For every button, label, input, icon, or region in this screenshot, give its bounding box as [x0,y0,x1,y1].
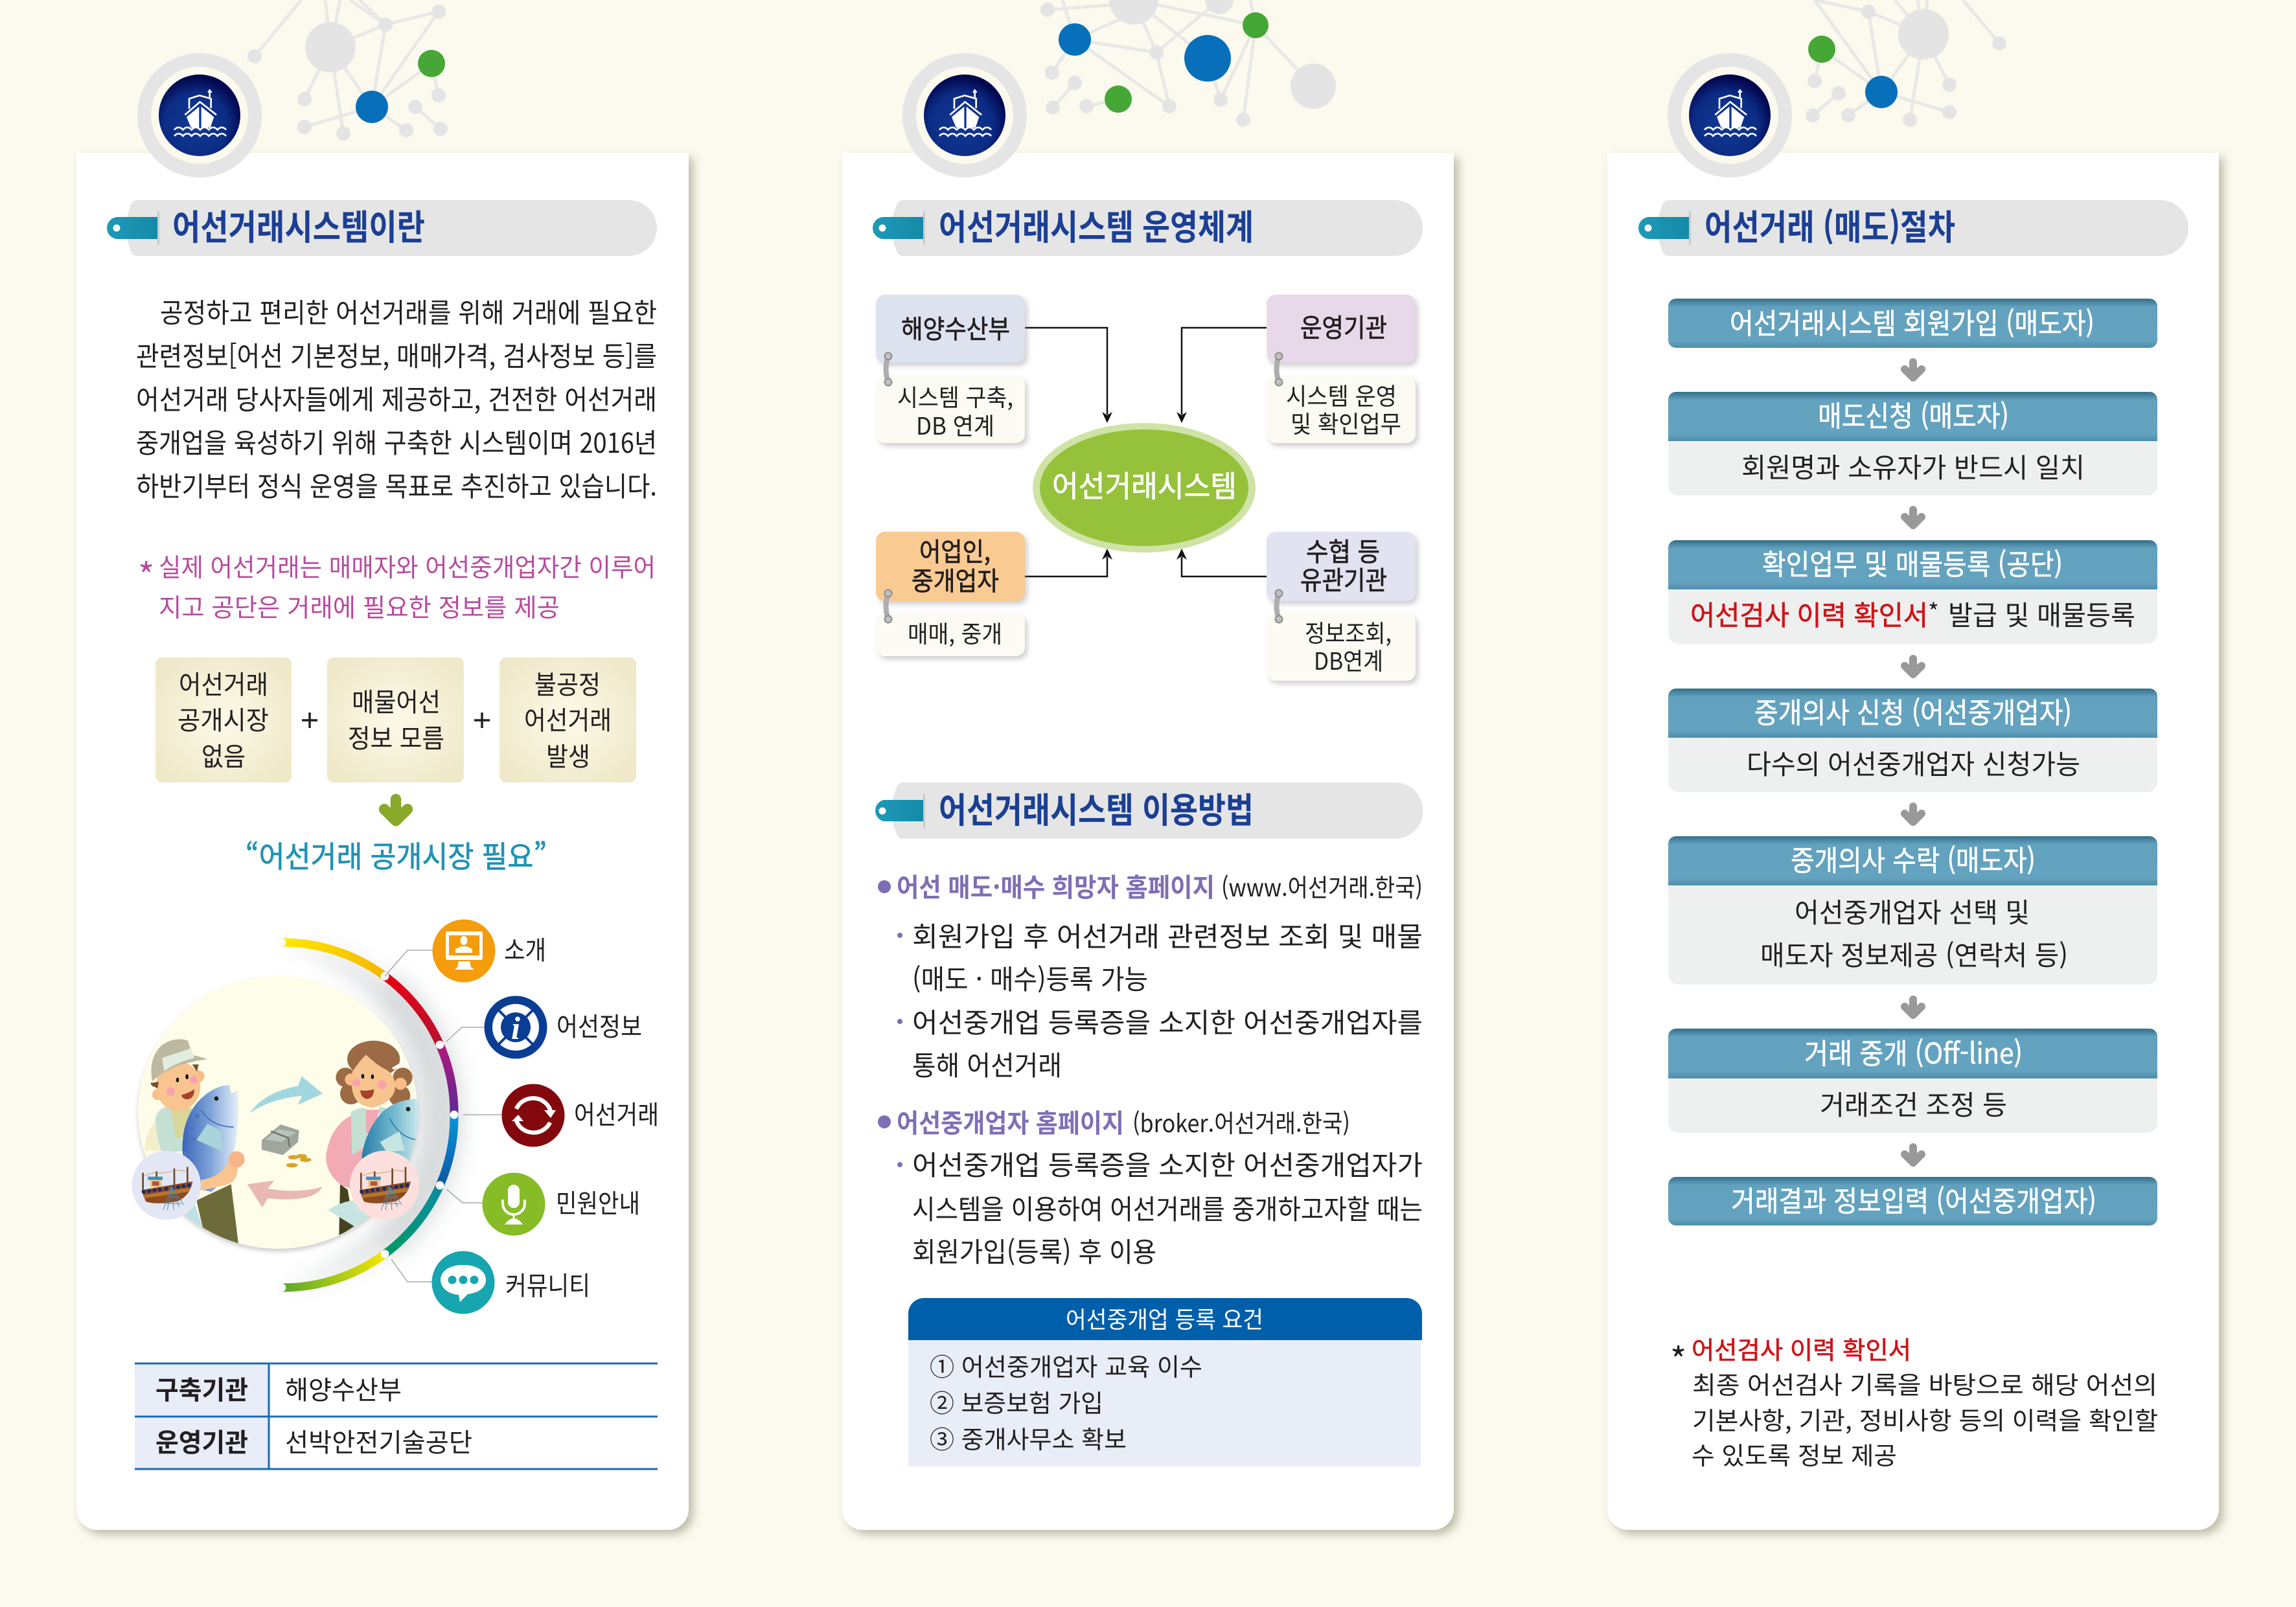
icon: 어선정보 info [485,996,547,1058]
panel: 어선거래 매도 절차 [1607,53,2219,1530]
step 5: 중개의사 수락: 어선중개업자 선택 및 [1795,891,2030,931]
arrow: connectors into central ellipse [1025,328,1267,576]
callout: 어선거래 공개시장 필요: “어선거래 공개시장 필요” [246,834,547,876]
figure: fisherman with fish [144,1039,245,1246]
text block: 매도·매수 희망자 홈페이지: 어선 매도·매수 희망자 홈페이지 [897,867,1215,904]
step 5: 중개의사 수락: 매도자 정보제공 (연락처 등) [1760,934,2068,974]
text block: footnote on inspection certificate: 기본사항, 기관, 정비사항 등의 이력을 확인할 [1692,1401,2158,1437]
step 3: 확인업무 및 매물등록: * [1928,594,1939,628]
icon: 어선정보 info: i [511,1010,520,1046]
step 7: 거래결과 정보입력: 거래결과 정보입력 (어선중개업자) [1731,1178,2096,1220]
illustration: fish trade between fisherman and buyer [132,976,419,1251]
text block: 매도·매수 희망자 홈페이지: 통해 어선거래 [912,1044,1062,1084]
card: 어업인, 중개업자: 매매, 중개 [908,615,1002,650]
step 2: 매도신청 [1668,392,2157,496]
plus sign [302,712,317,728]
step 3: 확인업무 및 매물등록 [1668,540,2157,644]
card: 어업인, 중개업자 [876,531,1025,656]
label: 커뮤니티: 커뮤니티 [505,1265,590,1303]
text block: 어선중개업자 홈페이지: 회원가입(등록) 후 이용 [912,1231,1156,1270]
arrow: step 5 to 6 [1905,999,1922,1015]
step 6: 거래 중개: 거래조건 조정 등 [1820,1084,2007,1123]
text block: footnote on inspection certificate: * [1670,1332,1686,1384]
step 2: 매도신청: 회원명과 소유자가 반드시 일치 [1741,446,2085,486]
heading: 어선거래시스템이란 [107,199,657,256]
icon: 커뮤니티 speech bubble [431,1251,495,1314]
card: 해양수산부: 해양수산부 [901,308,1010,346]
diagram: operating structure [876,295,1416,681]
step 6: 거래 중개 [1668,1029,2157,1133]
text block: system description: 관련정보[어선 기본정보, 매매가격, 검사정보 등]를 [136,335,657,374]
step 3: 확인업무 및 매물등록: 확인업무 및 매물등록 (공단) [1762,541,2063,583]
step 4: 중개의사 신청: 다수의 어선중개업자 신청가능 [1747,743,2080,782]
text block: 매도·매수 희망자 홈페이지: 어선중개업 등록증을 소지한 어선중개업자를 [912,1001,1423,1041]
arrow: step 3 to 4 [1905,659,1922,674]
card: 운영기관: 및 확인업무 [1291,405,1401,440]
box: 어선중개업 등록 요건 [908,1298,1422,1466]
icon: 민원안내 microphone [482,1172,545,1236]
card: 운영기관: 시스템 운영 [1286,377,1397,412]
icon: boat in right bubble [350,1151,419,1220]
text block: 어선중개업자 홈페이지: 시스템을 이용하여 어선거래를 중개하고자할 때는 [912,1188,1423,1227]
card: 해양수산부 [876,295,1025,443]
step 5: 중개의사 수락 [1668,836,2157,985]
text block: 매도·매수 희망자 홈페이지: 회원가입 후 어선거래 관련정보 조회 및 매물 [912,915,1423,955]
box: 어선중개업 등록 요건: ③ 중개사무소 확보 [930,1420,1127,1455]
arc: coloured menu ring [278,939,458,1292]
icon: 소개 monitor [433,920,495,982]
network decoration: right [1806,0,2006,127]
text block: footnote on inspection certificate: 최종 어선검사 기록을 바탕으로 해당 어선의 [1692,1365,2157,1401]
network decoration: centre [1040,0,1336,127]
icon: banknotes and coins [262,1124,312,1167]
arrow: step 6 to 7 [1905,1147,1922,1163]
card: 수협 등 유관기관: 수협 등 [1306,531,1380,569]
label: 어선정보: 어선정보 [557,1006,642,1043]
box: 불공정 어선거래 발생: 어선거래 [524,700,612,737]
box: 어선중개업 등록 요건: ② 보증보험 가입 [930,1384,1103,1419]
text block: footnote on inspection certificate [1670,1330,2158,1472]
step 5: 중개의사 수락: 중개의사 수락 (매도자) [1791,838,2036,879]
box: 어선거래 공개시장 없음: 공개시장 [178,700,269,737]
table: organizations: 해양수산부 [285,1369,402,1407]
text block: note in pink: * [138,548,154,599]
table: organizations: 선박안전기술공단 [285,1422,472,1459]
text block: 어선중개업자 홈페이지 [878,1102,1423,1270]
card: 해양수산부: DB 연계 [916,407,994,442]
card: 운영기관 [1267,295,1416,443]
card: 수협 등 유관기관 [1267,531,1416,681]
heading: 어선거래시스템 운영체계 [873,199,1423,256]
ellipse: 어선거래시스템: 어선거래시스템 [1052,463,1237,506]
label: 민원안내: 민원안내 [556,1183,640,1220]
box: 어선거래 공개시장 없음 [155,657,292,782]
text block: footnote on inspection certificate: 수 있도록 정보 제공 [1692,1436,1897,1472]
text block: system description: 중개업을 육성하기 위해 구축한 시스템이며 2016년 [136,422,657,461]
text block: note in pink: 실제 어선거래는 매매자와 어선중개업자간 이루어 [159,548,656,584]
step 1: 회원가입 [1668,299,2157,348]
heading: 어선거래시스템이란: 어선거래시스템이란 [172,199,425,250]
text block: system description: 하반기부터 정식 운영을 목표로 추진하고 있습니다. [136,465,657,505]
plus sign [474,712,490,728]
arrow: step 1 to 2 [1905,362,1922,378]
text block: system description: 공정하고 편리한 어선거래를 위해 거래에 필요한 [160,291,657,331]
text block: system description [136,291,657,505]
box: 불공정 어선거래 발생: 불공정 [534,664,601,701]
box: 어선중개업 등록 요건: ① 어선중개업자 교육 이수 [930,1347,1202,1383]
heading: 어선거래시스템 이용방법: 어선거래시스템 이용방법 [939,782,1254,833]
box: 어선거래 공개시장 없음: 어선거래 [179,664,268,701]
step 3: 확인업무 및 매물등록: 어선검사 이력 확인서 [1690,594,1928,633]
table: organizations [135,1363,658,1469]
heading: 어선거래 (매도)절차 [1638,199,2188,256]
card: 수협 등 유관기관: 유관기관 [1300,560,1387,597]
text block: footnote on inspection certificate: 어선검사 이력 확인서 [1692,1330,1911,1366]
step 6: 거래 중개: 거래 중개 (Off-line) [1804,1031,2023,1072]
heading: 어선거래시스템 운영체계: 어선거래시스템 운영체계 [939,199,1254,250]
icon: ship badge [1668,53,1792,177]
text block: 매도·매수 희망자 홈페이지 [878,867,1423,1084]
icon: boat in left bubble [132,1151,201,1220]
icon: ship badge [902,53,1027,177]
ellipse: 어선거래시스템 [1033,423,1256,553]
box: 매물어선 정보 모름: 매물어선 [352,681,441,719]
text block: 어선중개업자 홈페이지: 어선중개업 등록증을 소지한 어선중개업자가 [912,1144,1423,1183]
table: organizations: 구축기관 [155,1369,248,1407]
icon: ship badge [137,53,262,177]
step 4: 중개의사 신청: 중개의사 신청 (어선중개업자) [1754,690,2072,731]
label: 어선거래: 어선거래 [574,1094,659,1132]
box: 매물어선 정보 모름: 정보 모름 [348,718,444,755]
text block: 매도·매수 희망자 홈페이지: (매도 · 매수)등록 가능 [912,958,1148,997]
step 4: 중개의사 신청 [1668,689,2157,792]
text block: note in pink [138,548,656,624]
step 1: 회원가입: 어선거래시스템 회원가입 (매도자) [1730,301,2095,342]
card: 수협 등 유관기관: DB연계 [1314,642,1383,677]
card: 어업인, 중개업자: 중개업자 [912,560,999,598]
leader lines [385,950,503,1282]
box: 매물어선 정보 모름 [327,657,464,782]
label: 소개: 소개 [504,929,546,967]
card: 수협 등 유관기관: 정보조회, [1305,614,1392,649]
arrow: green down [384,799,408,821]
icon: 어선거래 exchange arrows [501,1084,565,1146]
text block: system description: 어선거래 당사자들에게 제공하고, 건전한 어선거래 [136,378,657,418]
network decoration: left [247,0,448,141]
arrow: goods flow to the left [247,1181,323,1207]
card: 해양수산부: 시스템 구축, [897,378,1013,413]
figure: buyer with fish [326,1041,418,1236]
panel: 어선거래시스템이란 [76,53,689,1530]
text block: 매도·매수 희망자 홈페이지: (www.어선거래.한국) [1221,868,1423,904]
table: organizations: 운영기관 [155,1422,248,1459]
heading: 어선거래 (매도)절차: 어선거래 (매도)절차 [1705,199,1955,250]
arrow: step 4 to 5 [1905,806,1922,822]
arrow: money flow to the right [250,1077,323,1113]
card: 어업인, 중개업자: 어업인, [919,531,991,569]
text block: 어선중개업자 홈페이지: (broker.어선거래.한국) [1132,1104,1350,1139]
arrow: step 2 to 3 [1905,510,1922,525]
panel: 운영체계 및 이용방법 [842,53,1454,1530]
text block: note in pink: 지고 공단은 거래에 필요한 정보를 제공 [159,588,560,624]
box: 불공정 어선거래 발생 [499,657,636,782]
step 3: 확인업무 및 매물등록: 발급 및 매물등록 [1948,594,2135,633]
box: 어선중개업 등록 요건: 어선중개업 등록 요건 [1066,1301,1263,1335]
step 2: 매도신청: 매도신청 (매도자) [1818,393,2009,435]
box: 불공정 어선거래 발생: 발생 [546,736,590,773]
text block: 어선중개업자 홈페이지: 어선중개업자 홈페이지 [897,1102,1124,1140]
box: 어선거래 공개시장 없음: 없음 [201,736,246,773]
heading: 어선거래시스템 이용방법 [875,782,1423,839]
card: 운영기관: 운영기관 [1300,307,1387,345]
shadow behind ring [282,944,452,1285]
